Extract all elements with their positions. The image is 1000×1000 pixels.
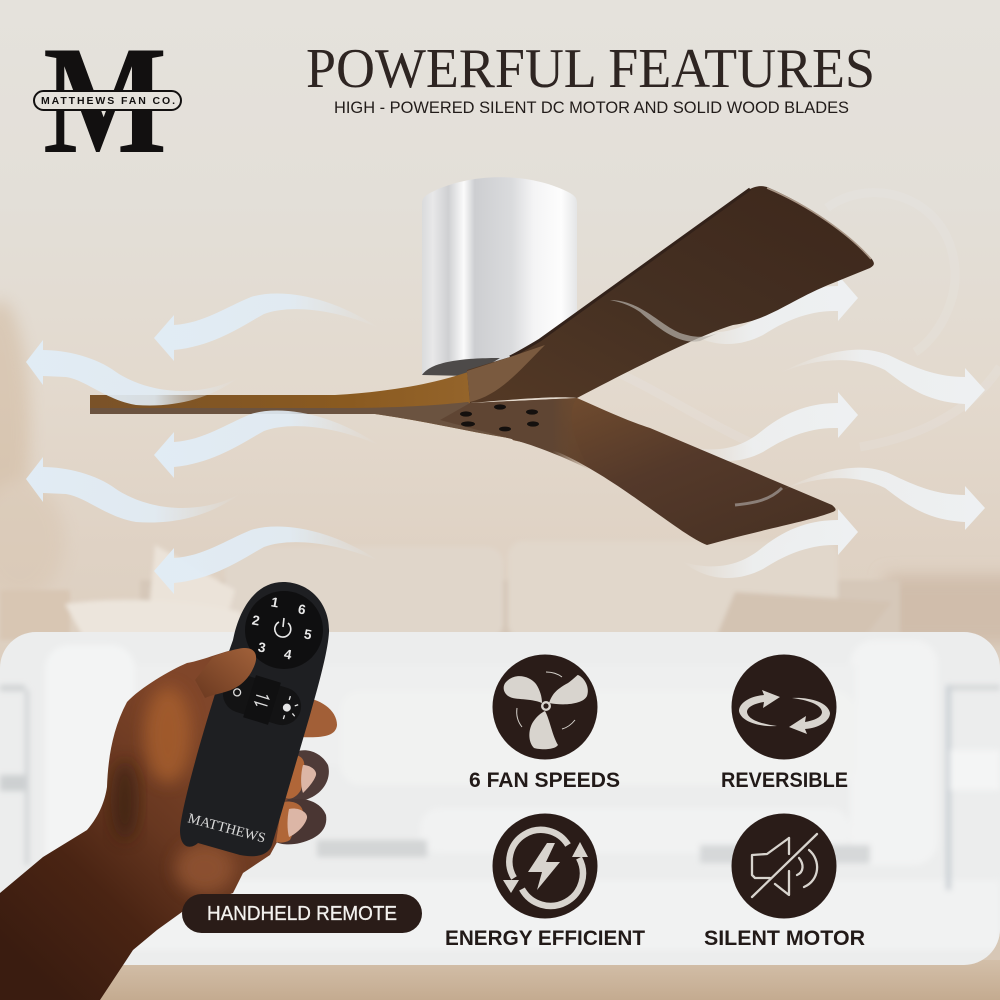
feature: reversible bbox=[721, 654, 848, 792]
handheld remote with hand bbox=[0, 582, 337, 1000]
airflow wave over lower blade bbox=[735, 488, 782, 505]
thumb bbox=[195, 648, 256, 698]
hub underside bbox=[440, 398, 590, 470]
feature: energy efficient bbox=[445, 814, 645, 950]
remote brand text: MATTHEWS bbox=[186, 811, 267, 847]
hand and forearm bbox=[0, 648, 300, 1000]
icon: rotating arrows bbox=[732, 654, 836, 760]
dial numbers: 3 bbox=[257, 639, 267, 656]
airflow arrows: right side bbox=[683, 350, 985, 578]
dial numbers: 1 bbox=[270, 594, 280, 611]
label: handheld remote bbox=[182, 894, 422, 933]
logo: Matthews Fan Co.: MATTHEWS FAN CO. bbox=[41, 95, 175, 107]
background: floor strip bbox=[0, 960, 1000, 1000]
hand highlights bbox=[111, 687, 235, 894]
lower right blade bbox=[473, 398, 836, 545]
title: POWERFUL FEATURES bbox=[306, 38, 875, 100]
mounting screws bbox=[460, 404, 539, 431]
left blade bbox=[90, 372, 520, 440]
motor shadow bbox=[422, 358, 500, 376]
middle finger bbox=[285, 750, 329, 802]
dial numbers: 5 bbox=[303, 626, 313, 643]
fan motor housing bbox=[422, 177, 577, 375]
background: blurred sofa and cushions bbox=[0, 541, 900, 640]
logo: Matthews Fan Co.: M bbox=[43, 14, 167, 186]
remote dial bbox=[245, 591, 323, 669]
dial numbers: 4 bbox=[283, 646, 293, 663]
feature: 6 fan speeds bbox=[469, 654, 620, 792]
remote buttons bbox=[217, 667, 307, 733]
icon: fan bbox=[492, 654, 598, 760]
ceiling fan bbox=[90, 177, 874, 545]
icon: muted speaker bbox=[732, 814, 836, 918]
label: SILENT MOTOR bbox=[704, 927, 865, 950]
index finger bbox=[295, 698, 337, 737]
dial numbers: 2 bbox=[251, 612, 261, 629]
feature: silent motor bbox=[704, 814, 865, 950]
dial numbers: 6 bbox=[297, 601, 307, 618]
background: blurred wall shade on the right bbox=[885, 575, 1000, 645]
label: ENERGY EFFICIENT bbox=[445, 927, 645, 950]
dial numbers bbox=[251, 594, 313, 663]
remote body bbox=[180, 582, 329, 856]
upper right blade bbox=[467, 186, 874, 403]
airflow arrows behind blades bbox=[683, 275, 858, 461]
subtitle: HIGH - POWERED SILENT DC MOTOR AND SOLID WOOD BLADES bbox=[334, 99, 849, 117]
airflow: faint swirls bbox=[600, 193, 1000, 447]
label: 6 FAN SPEEDS bbox=[469, 769, 620, 792]
label: handheld remote: HANDHELD REMOTE bbox=[207, 903, 397, 925]
airflow arrows: left side bbox=[26, 294, 379, 594]
power icon bbox=[275, 618, 291, 637]
frosted feature panel bbox=[0, 632, 1000, 965]
ring finger bbox=[276, 799, 326, 844]
airflow wave over blade bbox=[610, 300, 718, 342]
background: blurred plant on the left bbox=[0, 300, 65, 600]
label: REVERSIBLE bbox=[721, 769, 848, 792]
icon: lightning with cycle arrows bbox=[492, 814, 598, 918]
